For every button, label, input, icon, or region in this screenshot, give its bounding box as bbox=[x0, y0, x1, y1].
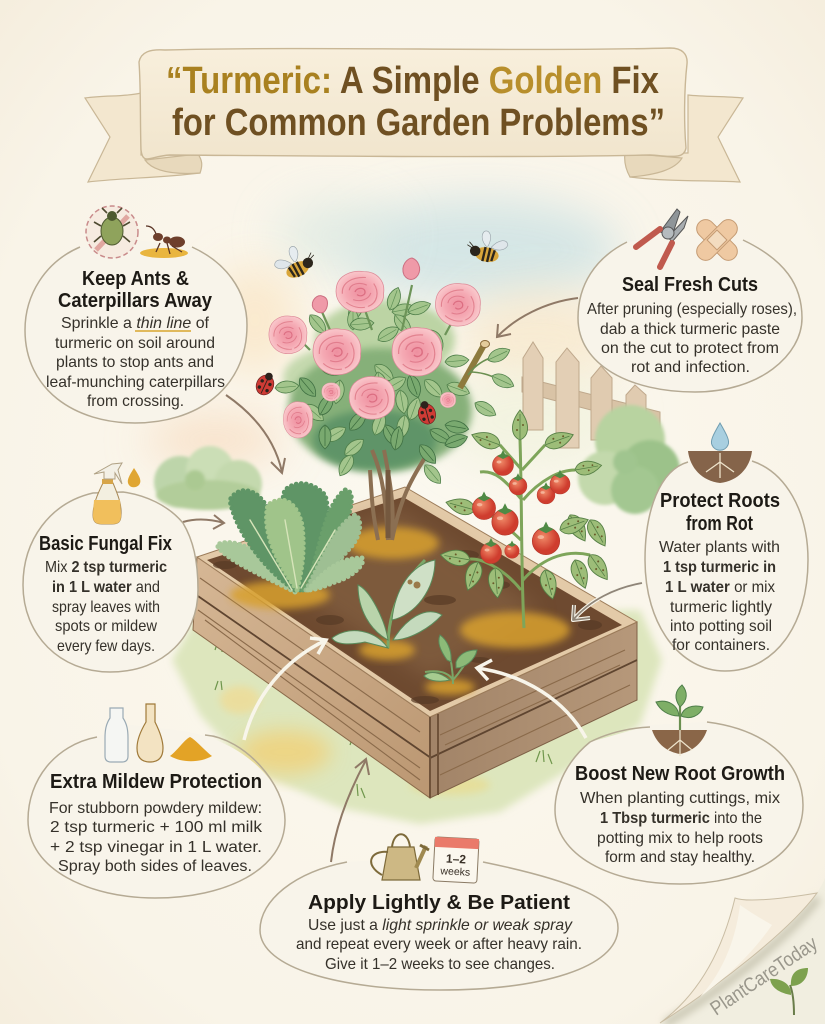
heading: Apply Lightly & Be Patient bbox=[308, 892, 570, 914]
raised garden bed bbox=[193, 487, 637, 798]
ladybug left bbox=[253, 369, 278, 398]
ribbon folds bbox=[145, 153, 682, 177]
icon: crossed beetle bbox=[86, 206, 138, 258]
arrow: roots to tomato bbox=[573, 583, 642, 620]
arrow: fungal to lettuce bbox=[183, 515, 224, 529]
panel: protect roots: from Rot bbox=[686, 513, 753, 535]
body text: rot and infection. bbox=[631, 359, 750, 376]
icon: turmeric pile bbox=[170, 737, 212, 761]
heading: Extra Mildew Protection bbox=[50, 771, 262, 793]
icon: sprout bbox=[770, 968, 808, 1015]
bush left bbox=[154, 446, 262, 510]
ribbon tail right bbox=[625, 95, 743, 182]
watercolour washes bbox=[145, 198, 620, 470]
icon: ant on turmeric bbox=[140, 226, 188, 258]
ribbon tail left bbox=[85, 93, 200, 182]
icon: watering can bbox=[371, 834, 429, 880]
title text: for Common Garden Problems” bbox=[172, 102, 665, 144]
body text bbox=[45, 559, 167, 655]
heading: Basic Fungal Fix bbox=[39, 533, 172, 555]
body text: form and stay healthy. bbox=[605, 849, 755, 866]
icon: calendar bbox=[433, 837, 479, 883]
heading: Protect Roots bbox=[660, 490, 780, 512]
body text: dab a thick turmeric paste bbox=[600, 321, 780, 338]
body text: potting mix to help roots bbox=[597, 830, 763, 847]
body text: turmeric lightly bbox=[670, 599, 772, 616]
body text: Mix 2 tsp turmeric bbox=[45, 559, 167, 576]
body text: leaf-munching caterpillars bbox=[46, 374, 225, 391]
body text: 1 tsp turmeric in bbox=[663, 559, 776, 576]
bed top rim back bbox=[197, 487, 637, 717]
arrow: seal to cut bbox=[497, 298, 578, 337]
icon: oil bottle bbox=[137, 704, 163, 762]
panel: basic fungal fix bbox=[23, 463, 198, 672]
body text: turmeric on soil around bbox=[55, 335, 215, 352]
bed left outer wall bbox=[193, 557, 430, 798]
panel: apply lightly and be patient bbox=[260, 834, 618, 990]
cut stem bbox=[460, 340, 516, 392]
wood grain lines bbox=[195, 578, 637, 798]
soil bbox=[207, 497, 622, 711]
grass wash bbox=[172, 610, 662, 824]
icon: calendar: 1–2 bbox=[446, 851, 467, 867]
body text bbox=[580, 790, 780, 866]
body text bbox=[46, 315, 225, 410]
ladybug right bbox=[415, 399, 438, 426]
body text bbox=[587, 301, 797, 376]
body text: Spray both sides of leaves. bbox=[58, 858, 252, 875]
arrow: boost to seedling bbox=[477, 660, 586, 738]
body text: and repeat every week or after heavy rain. bbox=[296, 936, 582, 953]
body text: + 2 tsp vinegar in 1 L water. bbox=[50, 839, 262, 856]
title text bbox=[166, 60, 665, 144]
turmeric patches on soil bbox=[230, 527, 570, 695]
turmeric dust on grass bbox=[220, 686, 490, 795]
icon: spray bottle bbox=[93, 463, 122, 524]
bush right bbox=[578, 405, 680, 514]
mildew plant bbox=[332, 560, 442, 648]
seedling bbox=[424, 635, 477, 684]
body text: After pruning (especially roses), bbox=[587, 301, 797, 318]
body text: 2 tsp turmeric + 100 ml milk bbox=[50, 819, 263, 836]
body text: Water plants with bbox=[659, 539, 780, 556]
body text: on the cut to protect from bbox=[601, 340, 779, 357]
rose bush bbox=[269, 258, 516, 540]
heading: Boost New Root Growth bbox=[575, 763, 785, 785]
title text: “Turmeric: A Simple Golden Fix bbox=[166, 60, 659, 102]
body text bbox=[296, 917, 582, 973]
body text: When planting cuttings, mix bbox=[580, 790, 780, 807]
panel: keep ants and caterpillars away bbox=[25, 206, 247, 423]
bee right bbox=[465, 228, 510, 265]
arrow: apply to bed bbox=[331, 759, 369, 862]
lettuce plant bbox=[217, 484, 363, 592]
icon: drop and roots bbox=[688, 423, 752, 483]
heading: Seal Fresh Cuts bbox=[622, 274, 758, 296]
ribbon body bbox=[139, 48, 687, 159]
body text: 1 L water or mix bbox=[665, 579, 775, 596]
panel: seal fresh cuts bbox=[578, 209, 802, 392]
title banner bbox=[85, 48, 743, 182]
page curl bbox=[660, 878, 825, 1024]
body text: 1 Tbsp turmeric into the bbox=[600, 810, 762, 827]
body text: Use just a light sprinkle or weak spray bbox=[308, 917, 573, 934]
arrow: mildew to plant bbox=[244, 638, 326, 740]
body text: spots or mildew bbox=[55, 618, 157, 635]
body text bbox=[659, 539, 780, 654]
icon: pruning shears bbox=[636, 209, 688, 267]
body text: Give it 1–2 weeks to see changes. bbox=[325, 956, 555, 973]
bee left bbox=[270, 240, 320, 284]
icon: calendar: weeks bbox=[439, 865, 470, 879]
rose buds bbox=[403, 258, 420, 280]
heading: Keep Ants & bbox=[82, 268, 189, 290]
picket fence bbox=[522, 342, 660, 448]
arrow: ants to lettuce bbox=[226, 395, 285, 473]
body text: Sprinkle a thin line of bbox=[61, 315, 210, 332]
leaves bbox=[274, 285, 499, 487]
body text: plants to stop ants and bbox=[56, 354, 214, 371]
stems bbox=[300, 285, 452, 350]
body text: every few days. bbox=[57, 638, 155, 655]
panel: keep ants and caterpillars away: Caterpillars Away bbox=[58, 290, 213, 312]
tomato plant bbox=[439, 410, 613, 628]
icon: drop bbox=[128, 468, 140, 487]
body text bbox=[49, 800, 263, 875]
dark soil clumps bbox=[213, 550, 602, 704]
icon: seedling bbox=[652, 685, 707, 756]
panel: protect roots bbox=[645, 423, 808, 671]
ground grass patches bbox=[215, 638, 596, 798]
panel: boost new root growth bbox=[555, 685, 803, 884]
foliage mass bbox=[283, 300, 472, 472]
trunk bbox=[370, 450, 430, 540]
body text: from crossing. bbox=[87, 393, 184, 410]
body text: into potting soil bbox=[670, 618, 772, 635]
icon: bandage bbox=[693, 216, 741, 264]
icon: milk bottle bbox=[105, 708, 128, 762]
body text: For stubborn powdery mildew: bbox=[49, 800, 262, 817]
body text: for containers. bbox=[672, 637, 770, 654]
body text: in 1 L water and bbox=[52, 579, 160, 596]
panel: extra mildew protection bbox=[28, 704, 285, 898]
roses bbox=[336, 271, 384, 312]
body text: spray leaves with bbox=[52, 599, 160, 616]
bed right outer wall bbox=[430, 622, 637, 798]
